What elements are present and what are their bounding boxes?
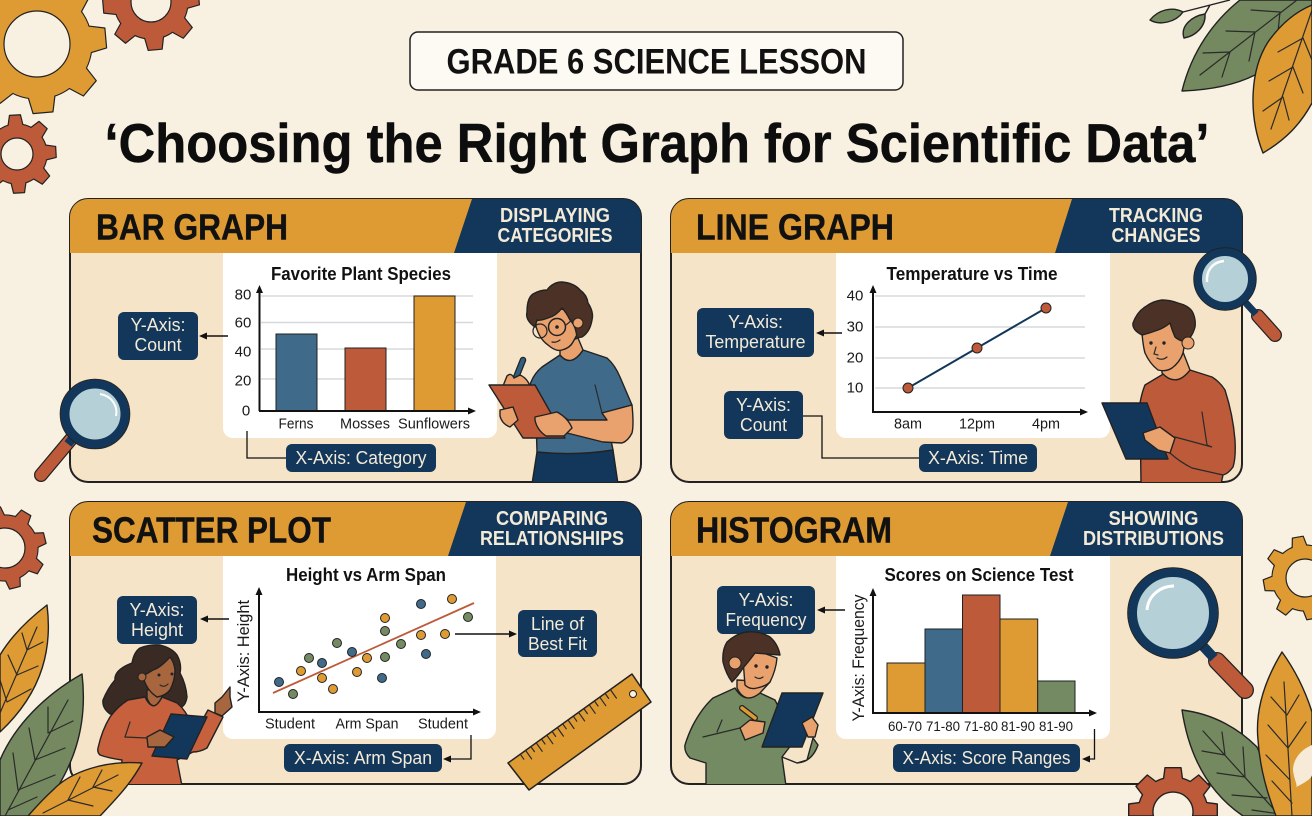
connector: x-axis category	[247, 431, 286, 458]
label: y-axis height	[117, 596, 197, 644]
label: x-axis time	[919, 444, 1037, 472]
tagline: displaying categories: CATEGORIES	[498, 225, 612, 247]
label: y-axis frequency	[717, 586, 815, 634]
histogram chart: 81-90	[1039, 718, 1073, 734]
bar chart: Sunflowers	[398, 416, 470, 432]
label: x-axis score ranges	[893, 744, 1080, 772]
icon: ruler	[508, 674, 651, 790]
histogram chart: Scores on Science Test	[884, 565, 1074, 585]
line chart: 12pm	[959, 416, 995, 432]
arrow: to y-axis count	[201, 335, 228, 337]
label: y-axis height: Y-Axis:	[130, 600, 184, 620]
label: line of best fit: Line of	[531, 614, 585, 634]
arrow: to x-axis score ranges	[1084, 729, 1094, 759]
label: line of best fit	[518, 610, 597, 657]
histogram chart	[836, 556, 1110, 739]
line chart: 20	[847, 350, 863, 366]
line chart: 8am	[894, 416, 922, 432]
data points	[274, 594, 472, 698]
gear: red bottom	[1129, 768, 1217, 816]
scatter chart	[223, 556, 496, 739]
bar chart: 0	[242, 402, 250, 420]
gear: red mid left	[0, 506, 47, 590]
histogram chart: 71-80	[926, 718, 960, 734]
label: x-axis category	[286, 444, 436, 472]
label: x-axis category: X-Axis: Category	[296, 448, 426, 468]
panel header: histogram	[671, 502, 1242, 556]
tagline: showing distributions: SHOWING	[1108, 508, 1198, 530]
label: y-axis count: Count	[740, 415, 787, 435]
histogram chart: 81-90	[1001, 718, 1035, 734]
scatter chart: Arm Span	[336, 716, 398, 732]
character: boy with clipboard	[685, 632, 823, 786]
bar chart: Mosses	[340, 416, 390, 432]
bar chart: 60	[235, 314, 251, 332]
label: y-axis frequency: Y-Axis:	[738, 590, 794, 610]
hand: girl pointing	[215, 687, 232, 716]
histogram chart: Y-Axis: Frequency	[850, 594, 868, 722]
label: y-axis temperature: Y-Axis:	[728, 312, 783, 332]
bar chart: 20	[235, 372, 251, 390]
character: girl pointing	[98, 645, 223, 786]
scatter chart: Y-Axis: Height	[235, 600, 253, 702]
tagline: tracking changes	[1109, 205, 1203, 247]
leaf sprig top right	[1150, 0, 1230, 38]
connector: count to x-axis	[803, 416, 919, 458]
label: x-axis arm span: X-Axis: Arm Span	[294, 748, 432, 768]
icon: magnifying glass histogram panel	[1128, 568, 1245, 690]
tagline: showing distributions: DISTRIBUTIONS	[1083, 528, 1224, 550]
gear: large orange top left	[0, 0, 107, 114]
label: line of best fit: Best Fit	[528, 634, 587, 654]
arrow: to y-axis temperature	[818, 332, 842, 334]
panel: histogram	[671, 502, 1242, 786]
bar chart: 80	[235, 286, 251, 304]
leaf: green bottom left	[0, 674, 83, 816]
gear: small red left	[0, 115, 56, 193]
arrow: to y-axis frequency	[819, 609, 845, 611]
title pill	[410, 32, 903, 90]
character: student with tablet	[1102, 300, 1235, 484]
leaf: green top right	[1182, 0, 1312, 91]
leaf: orange bottom left	[28, 763, 142, 816]
panel: bar graph	[70, 199, 641, 484]
tagline: displaying categories	[498, 205, 612, 247]
label: y-axis frequency: Frequency	[726, 610, 806, 630]
label: y-axis count	[118, 312, 198, 360]
line chart	[836, 253, 1110, 438]
main title: ‘Choosing the Right Graph for Scientific Data’	[104, 112, 1210, 174]
leaf: green bottom right	[1182, 710, 1282, 816]
line chart: 10	[847, 380, 863, 396]
label: y-axis count	[724, 391, 803, 439]
leaf: orange top right	[1253, 5, 1312, 153]
leaf: orange left	[0, 605, 48, 732]
tagline: comparing relationships: COMPARING	[496, 508, 608, 530]
histogram chart: 71-80	[964, 718, 998, 734]
panel: scatter plot	[70, 502, 641, 786]
line chart: 4pm	[1032, 416, 1060, 432]
heading: bar graph: BAR GRAPH	[96, 206, 288, 248]
label: y-axis count: Y-Axis:	[736, 395, 791, 415]
tagline: comparing relationships: RELATIONSHIPS	[480, 528, 624, 550]
label: x-axis arm span	[284, 744, 442, 772]
gear: orange right	[1263, 536, 1312, 620]
label: x-axis score ranges: X-Axis: Score Ranges	[902, 748, 1070, 768]
panel: line graph	[671, 199, 1242, 484]
tagline: showing distributions	[1083, 508, 1224, 550]
histogram chart: 60-70	[888, 718, 922, 734]
line chart: Temperature vs Time	[886, 264, 1058, 284]
icon: magnifying glass bar panel	[41, 379, 130, 475]
icon: magnifying glass line panel	[1194, 248, 1275, 335]
character: student with glasses	[489, 282, 633, 484]
leaf: orange bottom right	[1257, 652, 1312, 816]
bar chart: Ferns	[278, 416, 314, 432]
tagline: comparing relationships	[480, 508, 624, 550]
line chart: 40	[847, 288, 863, 304]
heading: scatter plot: SCATTER PLOT	[92, 510, 331, 550]
bar chart: Favorite Plant Species	[271, 264, 451, 284]
scatter chart: Student	[265, 716, 316, 732]
heading: histogram: HISTOGRAM	[696, 510, 892, 550]
label: y-axis height: Height	[131, 620, 183, 640]
arrow: to y-axis height	[202, 618, 229, 620]
panel header: scatter plot	[70, 502, 641, 556]
heading: line graph: LINE GRAPH	[696, 206, 894, 248]
bar chart	[223, 253, 497, 438]
tagline: tracking changes: TRACKING	[1109, 205, 1203, 227]
title pill: GRADE 6 SCIENCE LESSON	[446, 42, 866, 82]
tagline: displaying categories: DISPLAYING	[500, 205, 610, 227]
line chart: 30	[847, 318, 863, 336]
label: y-axis temperature	[697, 308, 814, 357]
arrow: to line of best fit	[455, 633, 515, 635]
gear: red top	[102, 0, 200, 51]
label: y-axis count: Count	[134, 335, 182, 355]
panel header: line graph	[671, 199, 1242, 253]
arrow: to x-axis arm span	[445, 735, 471, 759]
label: y-axis temperature: Temperature	[706, 332, 806, 352]
panel header: bar graph	[70, 199, 641, 253]
tagline: tracking changes: CHANGES	[1112, 225, 1200, 247]
scatter chart: Student	[418, 716, 469, 732]
scatter chart: Height vs Arm Span	[286, 565, 446, 585]
label: y-axis count: Y-Axis:	[130, 315, 186, 335]
label: x-axis time: X-Axis: Time	[928, 448, 1028, 468]
bar chart: 40	[235, 344, 251, 360]
